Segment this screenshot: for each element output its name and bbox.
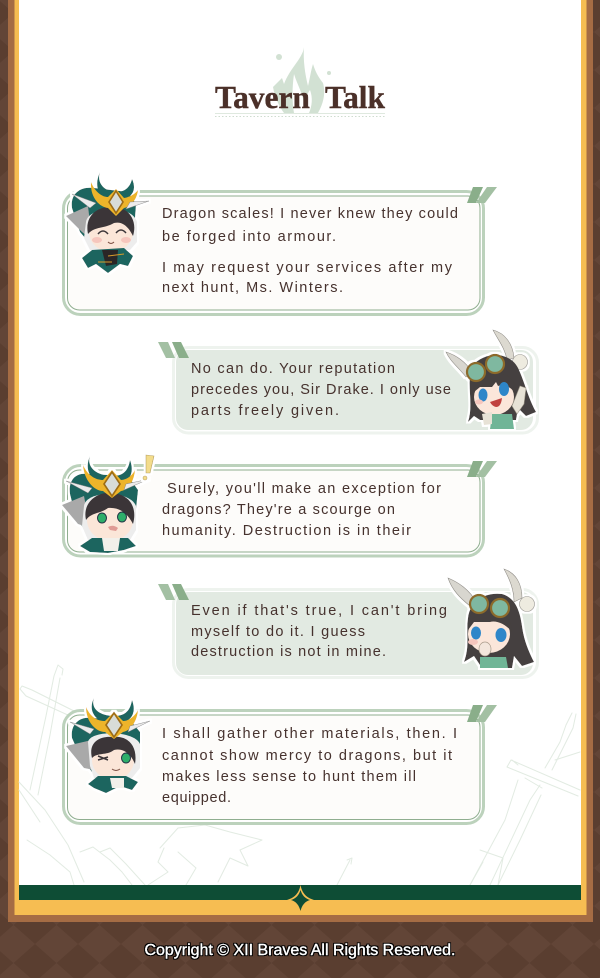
icon: exclamation mark xyxy=(143,455,154,480)
bubble 4 text: Even if that's true, I can't bring xyxy=(191,603,447,619)
icon: Sir Drake chibi, smiling xyxy=(66,172,149,273)
title: Tavern Talk logo xyxy=(215,47,385,116)
bubble 1 text: I may request your services after my xyxy=(162,260,453,276)
bubble 2 text: parts freely given. xyxy=(191,403,339,419)
bubble 4 text: myself to do it. I guess xyxy=(191,624,365,640)
quote marks xyxy=(158,342,189,358)
quote marks xyxy=(158,584,189,600)
background sketch: swords and fallen figure xyxy=(19,665,580,885)
bubble 1 text: Dragon scales! I never knew they could xyxy=(162,206,458,222)
bubble 5 text: I shall gather other materials, then. I xyxy=(162,726,457,742)
icon: four-point star ornament xyxy=(287,885,314,912)
quote marks xyxy=(467,461,497,477)
footer band: dark green bar xyxy=(19,885,581,900)
icon: Ms. Winters chibi, hand at mouth xyxy=(448,569,534,668)
icon: Sir Drake chibi, surprised xyxy=(62,456,149,553)
bubble 5 text xyxy=(162,726,457,806)
panel: speech bubble 3 xyxy=(64,461,497,556)
bubble 2 text: precedes you, Sir Drake. I only use xyxy=(191,382,451,398)
bubble 5 text: cannot show mercy to dragons, but it xyxy=(162,748,452,764)
bubble 3 text xyxy=(162,481,441,539)
panel: speech bubble 4 xyxy=(158,584,538,678)
bubble 2 text xyxy=(191,361,451,419)
title underline xyxy=(215,114,385,116)
bubble 1 text: next hunt, Ms. Winters. xyxy=(162,280,343,296)
panel: speech bubble 5 xyxy=(64,705,497,824)
bubble 3 text: humanity. Destruction is in their xyxy=(162,523,411,539)
icon: flame behind title xyxy=(273,47,331,113)
bubble 1 text xyxy=(162,206,458,296)
bubble 2 text: No can do. Your reputation xyxy=(191,361,395,377)
bubble 3 text: dragons? They're a scourge on xyxy=(162,502,395,518)
title text: Tavern Talk xyxy=(215,79,385,115)
bubble 5 text: equipped. xyxy=(162,790,231,806)
bubble 3 text: Surely, you'll make an exception for xyxy=(167,481,441,497)
quote marks xyxy=(467,705,497,722)
quote marks xyxy=(467,187,497,203)
icon: Sir Drake chibi, winking xyxy=(66,698,150,793)
bubble 5 text: makes less sense to hunt them ill xyxy=(162,769,416,785)
bubble 1 text: be forged into armour. xyxy=(162,229,336,245)
bubble 4 text: destruction is not in mine. xyxy=(191,644,386,660)
copyright text: Copyright © XII Braves All Rights Reserved. xyxy=(144,942,456,959)
icon: Ms. Winters chibi, waving xyxy=(446,330,536,429)
panel: speech bubble 2 xyxy=(158,342,538,433)
bubble 4 text xyxy=(191,603,447,660)
panel: speech bubble 1 xyxy=(64,187,497,314)
